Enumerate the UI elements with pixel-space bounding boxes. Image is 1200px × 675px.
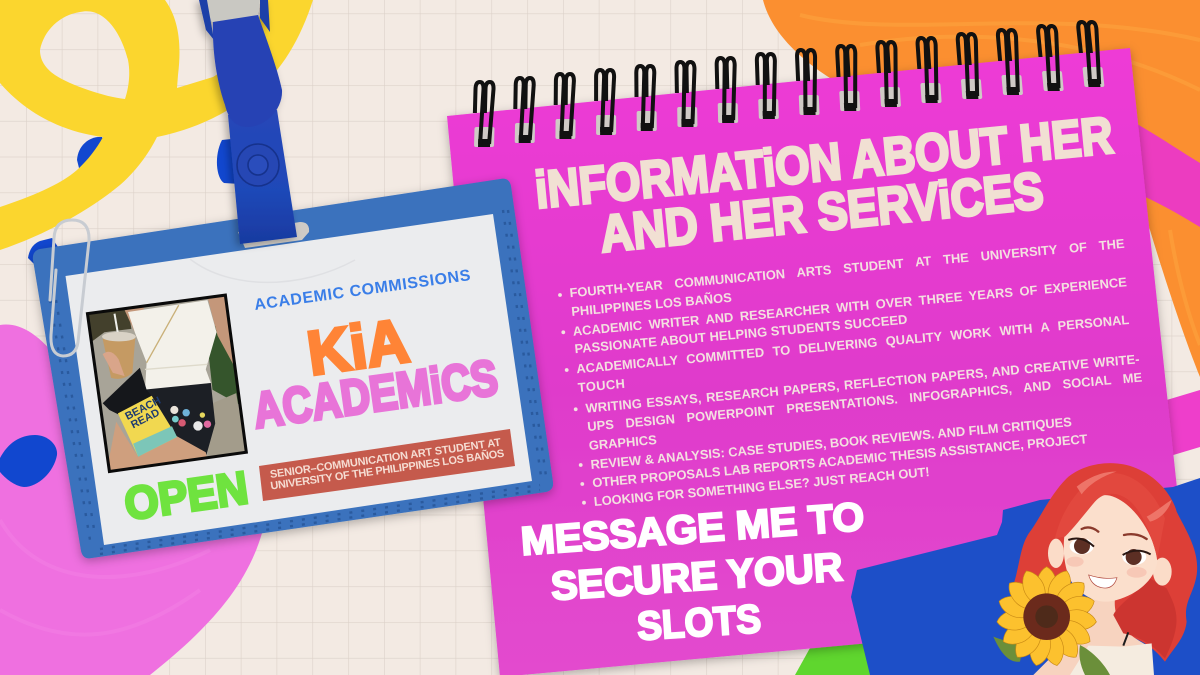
holder slot	[238, 222, 309, 248]
card insert	[66, 214, 532, 545]
leaf right	[1079, 645, 1110, 675]
notebook heading: iNFORMATiON ABOUT HER	[533, 107, 1115, 220]
call to action: MESSAGE ME TO	[519, 495, 866, 564]
call to action	[519, 495, 866, 649]
snap button	[237, 144, 279, 186]
dress strap	[1123, 632, 1128, 646]
notebook heading: AND HER SERViCES	[597, 162, 1046, 264]
bullet list: OTHER PROPOSALS LAB REPORTS ACADEMIC THESIS ASSISTANCE, PROJECT	[592, 431, 1088, 490]
dress	[1070, 643, 1154, 675]
paint: orange brush streaks	[800, 15, 1200, 345]
bullet list: FOURTH-YEAR COMMUNICATION ARTS STUDENT AT THE UNIVERSITY OF THE	[569, 236, 1125, 300]
bullet list: LOOKING FOR SOMETHING ELSE? JUST REACH OUT!	[593, 464, 930, 509]
neck and shoulders	[1033, 598, 1153, 675]
face	[1064, 495, 1157, 602]
photo: BEACH	[123, 395, 163, 423]
paint: blue dab on pink blob	[0, 435, 57, 487]
subtitle ribbon	[259, 429, 515, 501]
call to action: SECURE YOUR	[550, 545, 844, 609]
name: Academics: ACADEMiCS	[250, 349, 501, 439]
ID badge	[33, 179, 553, 558]
ears	[1048, 539, 1172, 586]
photo	[84, 292, 250, 474]
paint: yellow swirl	[0, 0, 313, 250]
smile	[1089, 575, 1117, 588]
paint: light strokes on pink blob	[0, 520, 210, 635]
notebook page	[447, 48, 1190, 675]
eyes	[1068, 538, 1151, 565]
seed head	[1023, 593, 1070, 640]
call to action: SLOTS	[636, 597, 762, 649]
blush	[1066, 557, 1147, 578]
name: Kia: KiA	[303, 306, 413, 389]
badge perforations	[50, 210, 546, 554]
clip side tabs	[199, 0, 270, 40]
bullet list: WRITING ESSAYS, RESEARCH PAPERS, REFLECTION PAPERS, AND CREATIVE WRITE-	[585, 351, 1140, 416]
dark hair side	[1113, 578, 1177, 658]
paint: pink stripe upper right	[1120, 115, 1200, 227]
bullet list: ACADEMIC WRITER AND RESEARCHER WITH OVER THREE YEARS OF EXPERIENCE	[572, 274, 1128, 339]
paint: small blue dab at card corner	[28, 238, 60, 270]
bullet list: TOUCH	[577, 376, 625, 395]
spiral binding rings	[474, 22, 1104, 147]
hair highlight	[1077, 472, 1172, 522]
badge holder	[33, 179, 553, 558]
paint: blue dab behind yellow swirl	[77, 137, 115, 172]
blue file folder	[851, 478, 1200, 675]
paint: blue dab near clip	[217, 138, 240, 184]
lanyard strap clip	[199, 0, 297, 244]
petals	[996, 567, 1097, 668]
bullet list: UPS DESIGN POWERPOINT PRESENTATIONS. INFOGRAPHICS, AND SOCIAL ME	[587, 369, 1143, 434]
lower strap	[228, 110, 297, 244]
photo: READ	[129, 407, 162, 431]
bullet list	[558, 236, 1143, 509]
sunflower	[996, 567, 1097, 668]
bullet list: GRAPHICS	[588, 432, 658, 453]
paint: pink blob bottom left	[0, 324, 262, 675]
paint: pink stripe lower right	[1150, 390, 1200, 462]
back hair	[1013, 463, 1197, 662]
paint: orange swoosh top right	[763, 0, 1200, 377]
eyebrows	[1082, 527, 1147, 539]
bangs	[1055, 473, 1165, 558]
badge heading: ACADEMIC COMMISSIONS	[253, 267, 472, 314]
paperclip	[50, 220, 89, 356]
bullet list: PASSIONATE ABOUT HELPING STUDENTS SUCCEED	[574, 312, 908, 356]
upper clip cover	[213, 15, 282, 127]
notebook	[447, 48, 1190, 675]
leaf left	[993, 637, 1023, 662]
bullet list: REVIEW & ANALYSIS: CASE STUDIES, BOOK REVIEWS. AND FILM CRITIQUES	[590, 414, 1073, 472]
bullet list: PHILIPPINES LOS BAÑOS	[571, 290, 733, 319]
card sleeve fold	[190, 259, 355, 282]
character illustration	[993, 463, 1197, 675]
subtitle ribbon: SENIOR–COMMUNICATION ART STUDENT AT	[269, 437, 502, 481]
bullet list: ACADEMICALLY COMMITTED TO DELIVERING QUALITY WORK WITH A PERSONAL	[576, 312, 1130, 376]
notebook heading	[533, 107, 1115, 264]
subtitle ribbon: UNIVERSITY OF THE PHILIPPINES LOS BAÑOS	[270, 447, 505, 492]
paint: green dab bottom	[795, 625, 890, 675]
metal clamp	[203, 0, 260, 22]
open label: OPEN	[121, 461, 251, 530]
